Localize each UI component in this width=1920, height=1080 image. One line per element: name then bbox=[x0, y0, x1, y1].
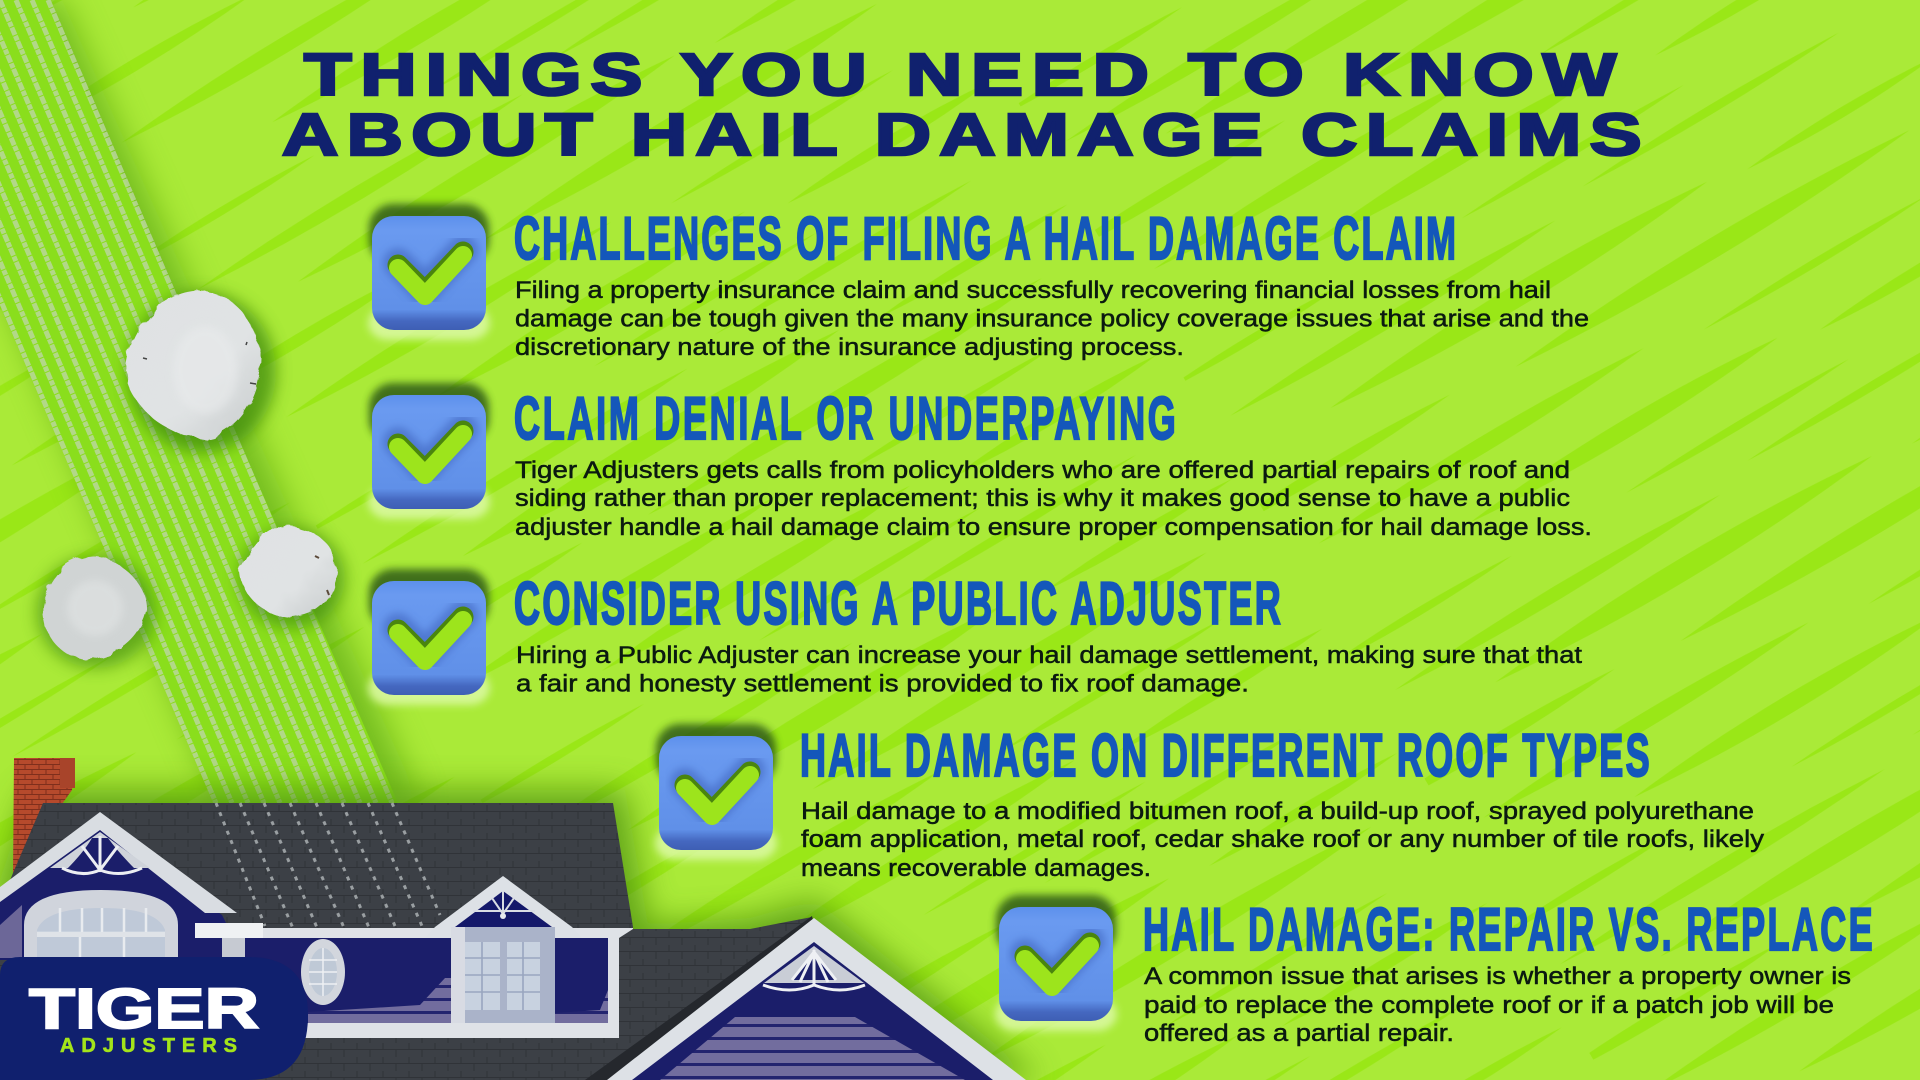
front gable trim bbox=[607, 918, 1026, 1080]
front wall bbox=[245, 938, 609, 1023]
rain droplets on roof bbox=[216, 803, 440, 945]
lower trim bbox=[290, 1023, 619, 1038]
logo badge bbox=[0, 957, 308, 1080]
lower roof bbox=[232, 917, 820, 1080]
porch post bbox=[222, 938, 245, 960]
heading: challenges: CHALLENGES OF FILING A HAIL DAMAGE CLAIM bbox=[514, 206, 1456, 272]
text: roof types body bbox=[801, 798, 1764, 882]
icon: checkbox 5 bbox=[995, 895, 1117, 1031]
text: claim denial body: adjuster handle a hail damage claim to ensure proper compensation for hail damage loss. bbox=[515, 514, 1592, 541]
hail trail streaks bbox=[0, 0, 420, 803]
oval window bbox=[301, 939, 345, 1005]
text: repair vs replace body bbox=[1144, 963, 1851, 1047]
text: challenges body: discretionary nature of the insurance adjusting process. bbox=[515, 334, 1184, 361]
text: repair vs replace body: offered as a partial repair. bbox=[1144, 1020, 1454, 1047]
title: THINGS YOU NEED TO KNOW bbox=[304, 41, 1617, 108]
logo tagline: ADJUSTERS bbox=[60, 1035, 237, 1057]
text: claim denial body bbox=[515, 457, 1592, 541]
house bbox=[0, 758, 1026, 1080]
text: repair vs replace body: A common issue that arises is whether a property owner is bbox=[1144, 963, 1851, 990]
left wall siding shadow bbox=[0, 905, 22, 958]
front gable siding bbox=[660, 1017, 965, 1080]
front gable ornament bbox=[763, 946, 865, 990]
front gable wall bbox=[620, 930, 1005, 1080]
left gable trim bbox=[0, 812, 237, 913]
heading: claim denial: CLAIM DENIAL OR UNDERPAYING bbox=[514, 386, 1176, 452]
hailstone right bbox=[239, 526, 345, 628]
logo wordmark: TIGER bbox=[29, 977, 259, 1041]
main roof bbox=[0, 803, 633, 1040]
arched window bbox=[24, 890, 178, 960]
left gable ornament bbox=[50, 832, 150, 874]
text: roof types body: Hail damage to a modified bitumen roof, a build-up roof, sprayed polyurethane bbox=[801, 798, 1754, 825]
heading: repair vs replace: HAIL DAMAGE: REPAIR VS. REPLACE bbox=[1143, 897, 1873, 963]
wall siding bbox=[308, 978, 451, 1023]
house shadow bbox=[0, 790, 1040, 1080]
text: repair vs replace body: paid to replace the complete roof or if a patch job will be bbox=[1144, 992, 1834, 1019]
icon: checkbox 2 bbox=[368, 383, 490, 519]
hailstone large bbox=[126, 291, 276, 452]
side roof bbox=[585, 916, 814, 1080]
dormer window bbox=[451, 927, 555, 1023]
chimney bbox=[13, 758, 75, 875]
section: challenges bbox=[368, 204, 1589, 361]
text: challenges body: Filing a property insurance claim and successfully recovering financial losses from hail bbox=[515, 277, 1551, 304]
text: roof types body: foam application, metal roof, cedar shake roof or any number of tile roofs, likely bbox=[801, 826, 1764, 853]
text: public adjuster body: Hiring a Public Adjuster can increase your hail damage settlement, making sure that that bbox=[516, 642, 1582, 669]
hailstone left bbox=[37, 556, 155, 668]
right trim bbox=[608, 938, 619, 1038]
icon: checkbox 3 bbox=[368, 569, 490, 705]
text: claim denial body: siding rather than proper replacement; this is why it makes good sense to have a public bbox=[515, 485, 1570, 512]
fascia band bbox=[263, 928, 633, 938]
title bbox=[282, 41, 1642, 168]
text: public adjuster body: a fair and honesty settlement is provided to fix roof damage. bbox=[516, 670, 1249, 698]
title: ABOUT HAIL DAMAGE CLAIMS bbox=[282, 101, 1642, 168]
icon: checkbox 4 bbox=[655, 724, 777, 860]
section: repair vs replace bbox=[995, 895, 1873, 1047]
heading: roof types: HAIL DAMAGE ON DIFFERENT ROOF TYPES bbox=[800, 723, 1650, 789]
section: roof types bbox=[655, 723, 1764, 882]
dormer bbox=[425, 876, 582, 938]
text: challenges body bbox=[515, 277, 1589, 361]
left gable wall bbox=[0, 828, 245, 960]
text: public adjuster body bbox=[516, 642, 1582, 698]
section: claim denial bbox=[368, 383, 1592, 541]
text: roof types body: means recoverable damages. bbox=[801, 855, 1151, 882]
text: claim denial body: Tiger Adjusters gets calls from policyholders who are offered partial repairs of roof and bbox=[515, 457, 1570, 484]
text: challenges body: damage can be tough given the many insurance policy coverage issues that arise and the bbox=[515, 306, 1589, 332]
heading: public adjuster: CONSIDER USING A PUBLIC ADJUSTER bbox=[514, 571, 1281, 637]
section: public adjuster bbox=[368, 569, 1582, 705]
icon: checkbox 1 bbox=[368, 204, 490, 340]
